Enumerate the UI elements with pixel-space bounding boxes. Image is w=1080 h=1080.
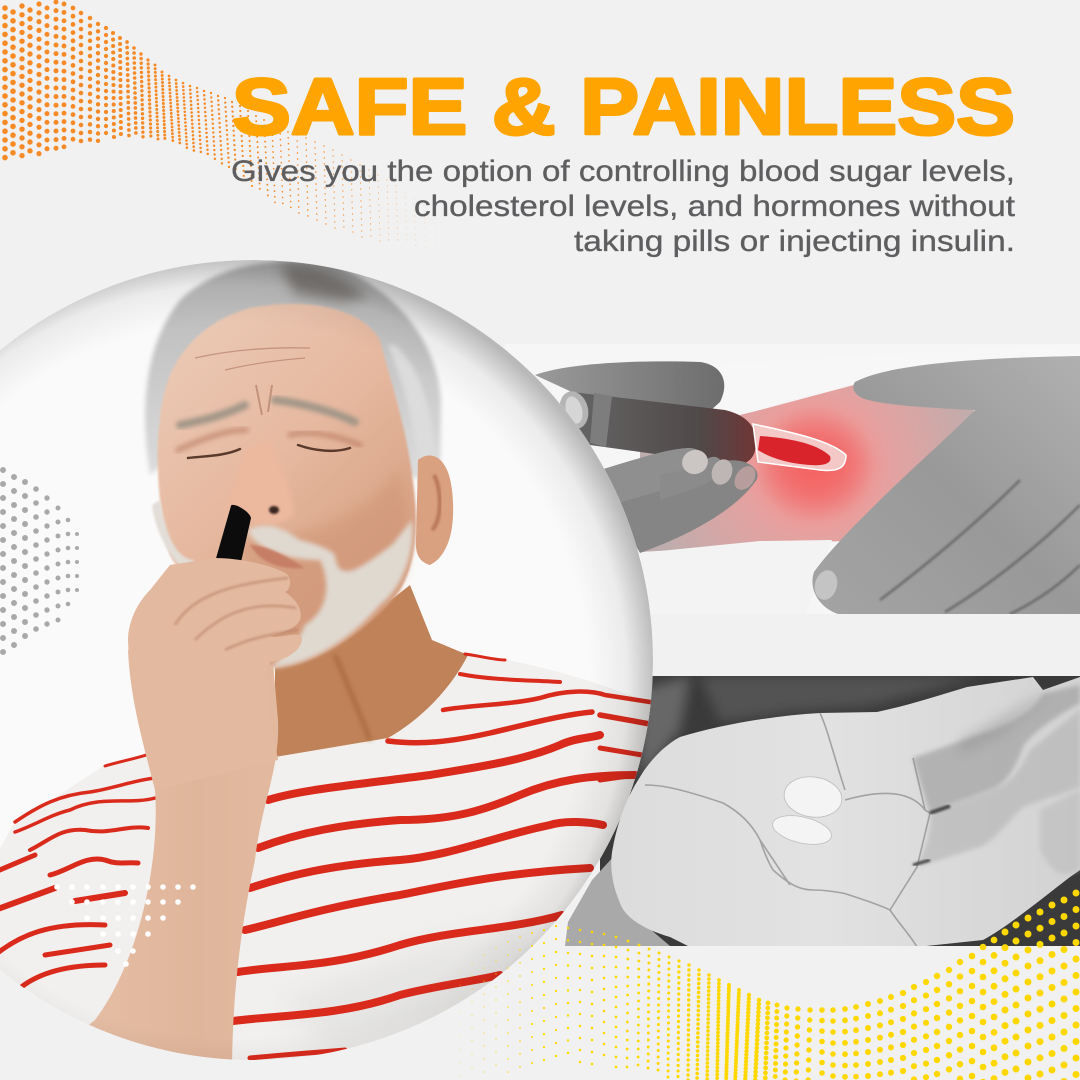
circle edge shading [0,260,653,1060]
halftone wave: orange [5,2,458,248]
shirt [0,652,660,1075]
photo: pills in hand (background) [600,676,1080,946]
waistband [661,540,832,551]
neck [275,585,468,757]
finger shading [913,685,1080,813]
subtitle text: Gives you the option of controlling blood sugar levels, [231,155,1015,188]
forehead wrinkles [195,348,310,415]
device [216,506,250,562]
hand [128,558,302,790]
halftone: grey dots [3,470,77,660]
pills [772,776,842,845]
photo: pills in hand (palm over circle) [565,677,1080,947]
face [158,304,416,668]
left hand: lower fingers [600,446,760,553]
hair back [145,261,441,490]
lips [250,545,305,568]
left hand: upper finger [535,361,724,408]
right hand [812,356,1080,614]
light tip [753,424,846,470]
pen device [556,388,846,470]
palm creases [645,713,930,947]
ear [416,455,453,565]
towel top [700,344,1080,416]
mustache and beard [248,520,413,668]
eyebrows [180,400,355,425]
arm [89,650,278,1060]
nose [254,488,292,522]
halftone: white dots on sleeve [54,884,196,967]
palm [611,677,1080,947]
subtitle text: cholesterol levels, and hormones without [414,190,1016,223]
abdomen with red glow [640,378,975,552]
shirt stripes [0,654,650,1058]
title: SAFE & PAINLESS [232,62,1015,151]
subtitle text [231,155,1016,258]
circle: man using device [0,260,660,1075]
photo: light therapy on abdomen [505,344,1080,614]
sleeve [565,855,670,946]
subtitle text: taking pills or injecting insulin. [574,225,1015,258]
halftone wave: yellow [424,893,1076,1080]
closed eyes [178,430,360,458]
